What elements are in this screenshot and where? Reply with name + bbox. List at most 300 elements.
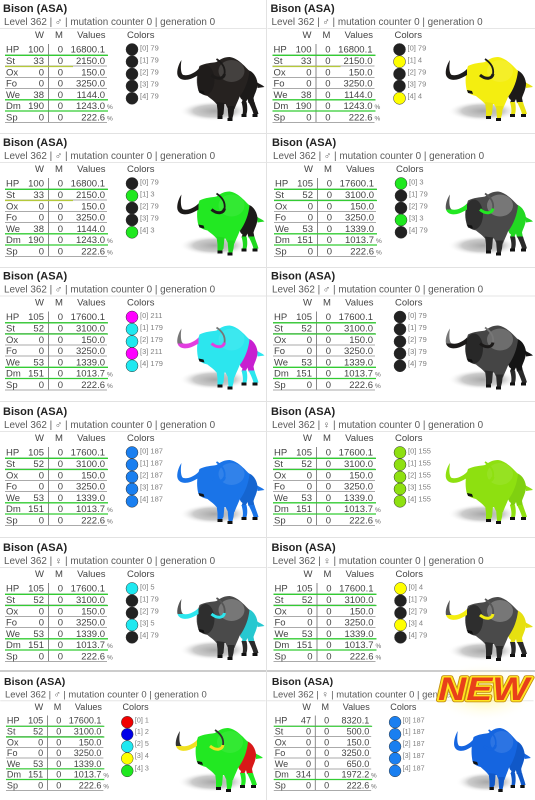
stats and text: HP	[275, 716, 287, 726]
stats and text: [1] 179	[140, 323, 163, 332]
stats and text: 3250.0	[345, 212, 374, 224]
stats and text: Level 362 | ♀ | mutation counter 0 | generation 0	[272, 556, 484, 567]
stats and text: 0	[326, 357, 331, 368]
stats and text: [1] 4	[408, 56, 422, 64]
stats and text: 0	[56, 780, 61, 790]
stats and text: 17600.1	[71, 312, 105, 323]
stats and text: Level 362 | ♂ | mutation counter 0 | generation 0	[273, 151, 485, 162]
stats and text: Values	[343, 702, 370, 712]
stats and text: 222.6	[81, 515, 105, 526]
stats and text: 3100.0	[344, 459, 373, 470]
stats and text: Fo	[6, 212, 17, 224]
stat table: 0	[58, 112, 63, 123]
stats and text: Dm	[274, 504, 289, 515]
stats and text: 16800.1	[71, 178, 105, 190]
stats and text: Dm	[274, 101, 288, 112]
stats and text: Bison (ASA)	[272, 676, 333, 688]
stats and text: HP	[6, 584, 19, 594]
stats and text: St	[6, 459, 15, 470]
stats and text: %	[107, 654, 113, 661]
stats and text: 0	[326, 651, 332, 662]
stats and text: 105	[297, 178, 313, 190]
stats and text: Colors	[127, 433, 155, 444]
title: Bison (ASA)	[3, 3, 68, 15]
stats and text: 3250.0	[343, 78, 372, 90]
stats and text	[0, 542, 266, 662]
stat table: 0	[58, 44, 63, 56]
stats and text: 1013.7	[345, 235, 374, 246]
stats and text: Values	[346, 164, 375, 175]
stats and text: We	[7, 759, 20, 769]
stats and text	[267, 137, 535, 257]
panel: black bison	[0, 3, 266, 123]
stats and text: %	[376, 654, 382, 661]
stats and text: M	[55, 569, 63, 580]
stats and text: 1013.7	[76, 640, 105, 651]
bison illustration	[177, 326, 264, 390]
stats and text	[0, 406, 266, 526]
stats and text: 0	[325, 90, 330, 101]
stat table: 0	[58, 78, 63, 90]
stats and text: 0	[58, 651, 63, 662]
stats and text: M	[323, 433, 331, 444]
stats and text: 53	[33, 629, 44, 640]
stats and text: Colors	[127, 569, 155, 580]
stats and text: W	[35, 298, 44, 308]
stats and text: 52	[302, 190, 313, 201]
stats and text: Dm	[274, 368, 289, 380]
stats and text: 0	[325, 56, 330, 67]
stats and text: HP	[274, 44, 287, 56]
stats and text: 151	[28, 640, 44, 651]
stat table: 190	[28, 101, 44, 112]
stats and text: 150.0	[350, 201, 374, 212]
stats and text: Fo	[274, 618, 286, 628]
panel: multicolor bison	[0, 671, 266, 792]
stats and text: 222.6	[81, 380, 105, 391]
stats and text: [4] 79	[409, 226, 428, 234]
stats and text: 52	[33, 727, 43, 737]
stats and text: 0	[58, 482, 63, 492]
stats and text: Sp	[274, 380, 286, 391]
stats and text: 0	[56, 727, 61, 737]
bison illustration	[446, 57, 533, 121]
stats and text: Bison (ASA)	[4, 676, 65, 688]
stats and text: 0	[308, 246, 313, 257]
stats and text: M	[55, 298, 63, 308]
stats and text: 17600.1	[339, 584, 374, 594]
stats and text: W	[35, 702, 44, 712]
stats and text: 0	[39, 335, 44, 346]
stats and text: 3250.0	[76, 482, 105, 492]
color swatches: [4] 79	[140, 92, 159, 100]
stats and text: 150.0	[79, 737, 101, 747]
stats and text: 0	[58, 235, 63, 246]
stats and text: [1] 187	[140, 458, 163, 468]
stats and text: 150.0	[349, 335, 373, 346]
stats and text	[0, 676, 266, 790]
stat table: 0	[58, 101, 63, 112]
stats and text: 150.0	[347, 737, 369, 747]
stats and text: 0	[326, 493, 331, 504]
stats and text: 53	[33, 493, 44, 504]
stats and text: 222.6	[350, 246, 374, 257]
stats and text: 17600.1	[339, 312, 373, 323]
stats and text: 105	[28, 448, 44, 458]
stats and text: 3100.0	[344, 595, 374, 606]
panel: yellow front bison	[268, 3, 535, 123]
stats and text: Colors	[127, 164, 155, 175]
bison illustration	[454, 728, 531, 792]
stats and text: 3250.0	[344, 482, 373, 492]
stats and text: %	[374, 104, 380, 111]
stat table: 1144.0	[77, 90, 105, 101]
stats and text: Values	[346, 569, 374, 580]
stats and text: 1339.0	[74, 759, 101, 769]
stats and text: %	[374, 115, 380, 122]
stats and text: 0	[326, 606, 332, 617]
stats and text: M	[324, 164, 332, 175]
stats and text: 0	[326, 595, 332, 606]
stats and text: 0	[58, 515, 63, 526]
stats and text: %	[376, 238, 382, 245]
stats and text: 0	[58, 312, 63, 323]
stats and text: 0	[58, 606, 63, 617]
stat table: %	[107, 104, 113, 111]
stats and text: %	[371, 783, 377, 790]
stats and text: 3250.0	[76, 212, 105, 224]
stats and text: We	[6, 224, 20, 235]
stats and text: Colors	[394, 30, 422, 41]
stats and text: 3100.0	[76, 459, 105, 470]
stats and text: Level 362 | ♂ | mutation counter 0 | generation 0	[5, 689, 207, 700]
stats and text: 222.6	[81, 246, 105, 257]
stats and text: 0	[326, 618, 332, 628]
stats and text: 3100.0	[344, 324, 373, 334]
stats and text: Level 362 | ♀ | mutation counter 0 | generation 0	[273, 689, 475, 700]
stats and text: 38	[33, 224, 44, 235]
stats and text: 222.6	[349, 515, 373, 526]
stats and text: %	[107, 249, 113, 256]
stats and text: Ox	[275, 201, 287, 212]
stats and text: Ox	[6, 606, 18, 617]
stats and text: Fo	[6, 618, 17, 628]
stats and text: We	[275, 759, 288, 769]
stats and text: [2] 5	[135, 740, 149, 748]
stats and text: 0	[325, 44, 330, 56]
stats and text: 0	[307, 380, 312, 391]
stats and text: [2] 79	[408, 606, 427, 616]
stats and text: %	[103, 783, 109, 790]
stats and text: 0	[58, 470, 63, 481]
bison illustration	[177, 57, 264, 121]
stats and text: [0] 187	[140, 446, 163, 456]
stats and text: 151	[296, 504, 312, 515]
stats and text: Values	[77, 433, 106, 444]
stats and text: Fo	[275, 748, 285, 758]
stat table: 222.6	[81, 112, 105, 123]
stats and text: %	[107, 507, 113, 514]
color swatches: [2] 79	[140, 68, 159, 76]
stats and text: [4] 79	[408, 630, 427, 640]
stats and text: We	[274, 493, 288, 504]
stats and text: Ox	[7, 737, 19, 747]
stat table: St	[6, 56, 15, 67]
panel: grey bison	[267, 270, 535, 391]
stats and text: We	[6, 629, 20, 640]
stats and text: 150.0	[349, 67, 372, 78]
stats and text: 2150.0	[76, 190, 105, 201]
stats and text	[267, 676, 534, 790]
stats and text: 222.6	[79, 780, 101, 790]
stats and text: [0] 1	[135, 717, 149, 725]
stats and text: 0	[324, 759, 329, 769]
stats and text: 222.6	[347, 780, 369, 790]
stats and text: 3250.0	[344, 346, 373, 357]
stats and text: Colors	[127, 298, 155, 308]
stats and text: [2] 187	[140, 470, 163, 480]
stats and text: 190	[28, 235, 44, 246]
stats and text: 0	[58, 618, 63, 628]
stats and text: Ox	[274, 470, 286, 481]
stats and text: 0	[326, 515, 331, 526]
new badge	[430, 662, 535, 722]
stats and text: 3250.0	[76, 346, 105, 357]
stat table: 0	[58, 90, 63, 101]
stats and text: [3] 5	[140, 618, 155, 628]
top border	[267, 670, 535, 672]
stats and text: W	[302, 30, 312, 41]
stats and text: 0	[306, 759, 311, 769]
stats and text: Ox	[274, 606, 287, 617]
stats and text: Values	[345, 30, 373, 41]
stats and text: [3] 79	[408, 347, 427, 356]
stats and text: Bison (ASA)	[3, 270, 68, 282]
stats and text: 0	[326, 324, 331, 334]
level line: Level 362 | ♂ | mutation counter 0 | generation 0	[4, 17, 216, 28]
stats and text: [0] 5	[140, 582, 155, 592]
stats and text: 0	[58, 380, 63, 391]
stats and text: 0	[39, 470, 44, 481]
stats and text: Ox	[275, 737, 287, 747]
stats and text: 0	[58, 640, 63, 651]
stats and text: [3] 79	[140, 214, 159, 222]
panel: blue bison, new	[267, 671, 535, 792]
stats and text: 17600.1	[71, 584, 105, 594]
stats and text: 0	[324, 716, 329, 726]
stats and text: 52	[301, 324, 312, 334]
stats and text: 0	[39, 651, 44, 662]
stats and text: 17600.1	[69, 716, 101, 726]
stats and text: [0] 211	[140, 311, 162, 320]
stats and text: 0	[327, 235, 332, 246]
stats and text: [4] 79	[408, 359, 427, 368]
stat table: 0	[39, 112, 44, 123]
stats and text: 151	[297, 235, 313, 246]
stats and text: 0	[307, 470, 312, 481]
stats and text: 0	[56, 770, 61, 780]
stat table: HP	[6, 44, 19, 56]
stats and text: 0	[327, 178, 332, 190]
stats and text: 1243.0	[76, 235, 105, 246]
stats and text: [2] 179	[140, 335, 163, 344]
bison illustration	[177, 596, 264, 660]
stats and text: 100	[296, 44, 312, 56]
stats and text: 0	[307, 335, 312, 346]
stats and text: 0	[307, 346, 312, 357]
stats and text: 1013.7	[76, 504, 105, 515]
panel: green rear bison	[267, 137, 535, 257]
stats and text: %	[371, 773, 377, 780]
stats and text	[0, 137, 266, 257]
stats and text: Fo	[7, 748, 18, 758]
stats and text: 0	[326, 335, 331, 346]
color swatches: Colors	[127, 30, 155, 41]
stats and text: 0	[308, 212, 313, 224]
stats and text: [1] 155	[408, 458, 431, 468]
stats and text: Level 362 | ♂ | mutation counter 0 | generation 0	[4, 151, 216, 162]
stats and text: %	[107, 372, 113, 378]
stats and text: 0	[56, 737, 61, 747]
stats and text: 1339.0	[344, 357, 373, 368]
stats and text: 0	[326, 470, 331, 481]
stats and text: [2] 79	[409, 202, 428, 210]
stats and text: [3] 155	[408, 482, 431, 492]
stats and text: Colors	[396, 569, 423, 580]
panel: cyan and magenta bison	[0, 270, 266, 391]
stats and text: 1013.7	[344, 368, 373, 380]
stats and text: Values	[75, 702, 102, 712]
stats and text: Fo	[6, 482, 17, 492]
stats and text: We	[275, 224, 289, 235]
stats and text: 0	[38, 780, 43, 790]
stats and text: 52	[33, 459, 44, 470]
stat table: 150.0	[81, 67, 105, 78]
stats and text: [3] 3	[409, 214, 424, 222]
stats and text: Fo	[274, 346, 285, 357]
panel: green front bison	[0, 137, 266, 257]
bison illustration	[446, 460, 533, 524]
stats and text: W	[304, 164, 313, 175]
stats and text: 1243.0	[343, 101, 372, 112]
stats and text: 3250.0	[342, 748, 369, 758]
stats and text: Sp	[274, 651, 286, 662]
stats and text: 0	[56, 748, 61, 758]
stats and text: 52	[301, 459, 312, 470]
stats and text: [3] 4	[408, 618, 423, 628]
stats and text: 1013.7	[344, 640, 374, 651]
stats and text: 0	[58, 584, 63, 594]
stats and text: Colors	[390, 702, 417, 712]
stats and text: 0	[306, 748, 311, 758]
stats and text: 1339.0	[345, 224, 374, 235]
stats and text: HP	[6, 312, 19, 323]
stats and text: St	[274, 459, 283, 470]
stats and text: %	[107, 238, 113, 245]
new badge: NEW	[438, 671, 533, 707]
stats and text: 53	[301, 357, 312, 368]
stats and text: 1972.2	[342, 770, 369, 780]
stats and text: 0	[58, 459, 63, 470]
bison illustration	[446, 326, 533, 390]
stats and text: 0	[306, 112, 312, 123]
stats and text: [0] 187	[403, 717, 425, 725]
stats and text: 222.6	[81, 651, 105, 662]
stats and text: [2] 79	[140, 202, 159, 210]
stats and text: 222.6	[349, 380, 373, 391]
stats and text: %	[103, 773, 109, 780]
stats and text: HP	[6, 448, 19, 458]
stats and text: Dm	[6, 640, 21, 651]
stats and text: 0	[307, 606, 312, 617]
color swatches: [3] 79	[140, 80, 159, 88]
stats and text: 0	[325, 78, 330, 90]
stats and text: %	[375, 518, 381, 525]
stats and text: 0	[307, 515, 312, 526]
stats and text: [4] 187	[140, 494, 163, 504]
stats and text: 1339.0	[76, 629, 105, 640]
stats and text: [0] 79	[408, 311, 427, 320]
stats and text: Sp	[6, 515, 18, 526]
stats and text: 0	[326, 368, 331, 380]
stat table: 0	[39, 78, 44, 90]
stats and text: [0] 79	[140, 178, 159, 186]
stats and text: 0	[58, 357, 63, 368]
bison illustration	[176, 728, 263, 792]
stats and text: Dm	[275, 770, 289, 780]
stats and text: 0	[326, 380, 331, 391]
stats and text: 0	[327, 190, 332, 201]
stats and text: 151	[28, 770, 43, 780]
stats and text: [0] 4	[408, 582, 423, 592]
stats and text: [2] 79	[408, 335, 427, 344]
stats and text: 0	[58, 335, 63, 346]
stats and text: Values	[345, 433, 374, 444]
stats and text: Values	[345, 298, 374, 308]
stats and text: Dm	[7, 770, 21, 780]
stats and text: M	[54, 702, 61, 712]
stats and text: %	[375, 372, 381, 378]
stats and text: W	[303, 433, 312, 444]
stats and text: M	[55, 164, 63, 175]
stats and text: [4] 3	[140, 226, 155, 234]
stats and text: [1] 79	[140, 594, 159, 604]
stats and text: Dm	[275, 235, 290, 246]
stats and text: [4] 187	[403, 764, 425, 772]
stats and text: 0	[306, 727, 311, 737]
stat table: Sp	[6, 112, 18, 123]
stats and text: 151	[28, 504, 44, 515]
stats and text: 0	[58, 212, 63, 224]
stats and text: 3250.0	[74, 748, 101, 758]
panel: blue bison	[0, 406, 266, 526]
stat table: 0	[39, 67, 44, 78]
stats and text: 0	[58, 246, 63, 257]
color swatches: [0] 79	[140, 44, 159, 52]
stats and text: Level 362 | ♀ | mutation counter 0 | generation 0	[272, 420, 484, 431]
stats and text: 0	[326, 640, 332, 651]
stats and text: 0	[56, 759, 61, 769]
stats and text: 0	[58, 368, 63, 380]
stats and text: Values	[77, 569, 106, 580]
stats and text: 0	[39, 246, 44, 257]
stats and text: Dm	[6, 504, 21, 515]
stats and text: [1] 79	[408, 323, 427, 332]
stats and text: [4] 179	[140, 359, 163, 368]
stats and text: %	[107, 383, 113, 390]
stats and text: [1] 2	[135, 728, 149, 736]
stats and text: 1013.7	[74, 770, 101, 780]
